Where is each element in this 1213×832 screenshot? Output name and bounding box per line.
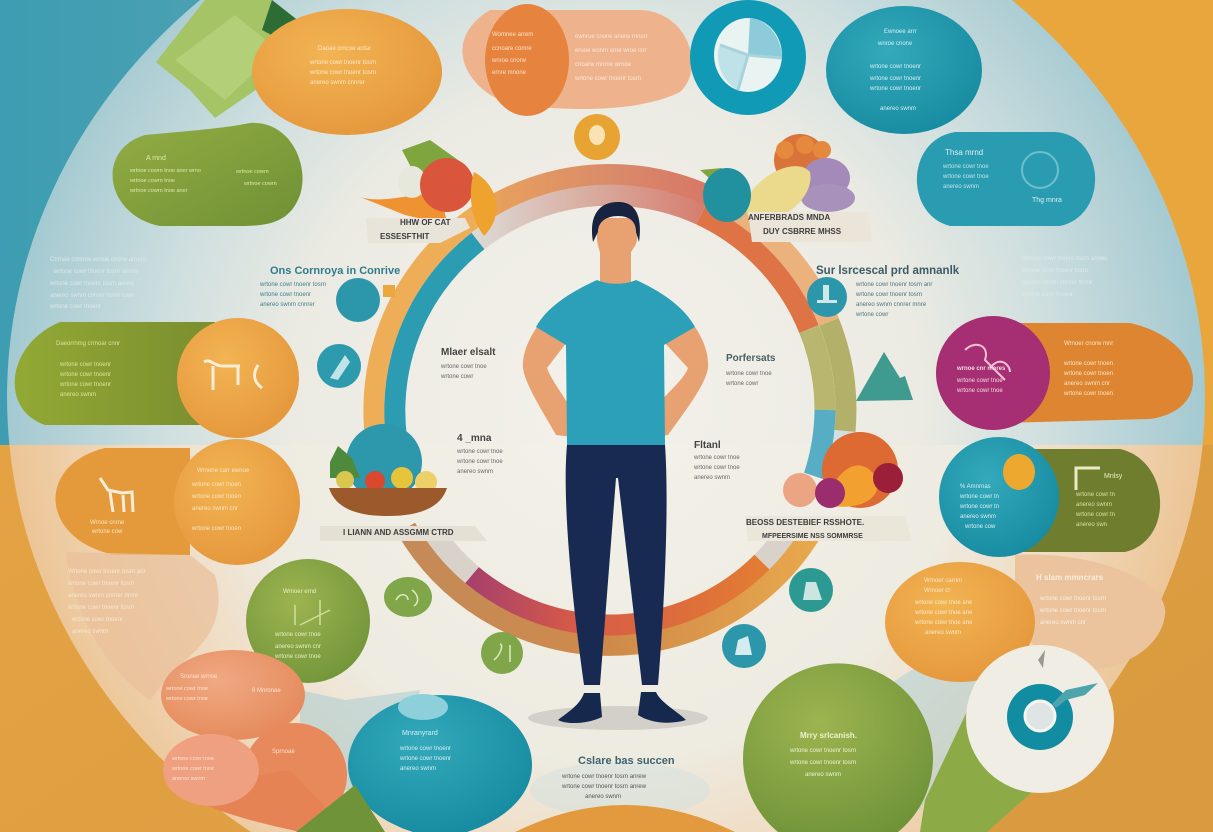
bubble: orange lower-right: Wrnoer cr: [924, 588, 950, 594]
arms: [523, 327, 582, 438]
bubble: right teal: wrtone cowr tnoe: [942, 174, 989, 180]
bubble: green lower-left: anereo swnm cnr: [275, 644, 321, 650]
bubbles: coral cluster: wrtone cowr tnoe: [165, 686, 208, 692]
bubble: top-right teal: [826, 6, 982, 134]
left faint text: Chrnae comrne wrnoe cnorw arnem: [50, 257, 146, 263]
chart: central ring: [374, 174, 846, 645]
icon: left circle: [317, 344, 361, 388]
label ribbon: bottom-left: [320, 526, 487, 541]
bubble: right magenta + orange: Wrnoer cnorw mnr: [1064, 341, 1113, 347]
bubble: right magenta + orange: wrtone cowr tnoen: [1063, 361, 1113, 367]
bubbles: coral cluster: Sprnoae: [272, 749, 295, 755]
bubble: right teal: wrtone cowr tnoe: [942, 164, 989, 170]
bubble: left lower orange pair: wrtone cowr tnoen: [191, 494, 241, 500]
text: left number: [456, 433, 503, 475]
left faint text: wrtone cowr tnoenr tosrn anrew: [53, 269, 139, 275]
bubble: orange lower-right: wrtone cowr tnoe ane: [914, 610, 973, 616]
bubble: top-right teal: Ewnoee arrr: [884, 29, 917, 35]
label ribbon: top-right: ANFERBRADS MNDA: [748, 213, 830, 222]
bubble: left lower orange pair: anereo swnm cnr: [192, 506, 238, 512]
shadow: [528, 706, 708, 730]
bubble: right teal + green: wrtone cowr tn: [959, 504, 999, 510]
icon: pie circle top: [690, 0, 806, 115]
bubble: left lower orange pair: Wrnene carr ewnoe: [197, 468, 250, 474]
label ribbon: top-right: [748, 212, 872, 242]
bubbles: coral cluster: wrtone cowr tnoe: [171, 766, 214, 772]
text: performance heading: wrtone cowr: [725, 381, 758, 387]
bubble: right magenta + orange: wrtone cowr tnoen: [1063, 371, 1113, 377]
bubble: right teal: [917, 132, 1095, 226]
text: mixed heading: wrtone cowr tnoe: [440, 364, 487, 370]
text: left number: anereo swnm: [457, 469, 493, 475]
bubble: left green: wrtnoe cowrn: [243, 181, 277, 187]
bubble: right teal + green: Mnlsy: [1104, 473, 1123, 480]
bubble: left green: [113, 123, 303, 226]
label ribbon: bottom-right: BEOSS DESTEBIEF RSSHOTE.: [746, 518, 864, 527]
faint block: lower-left: wrtone cowr tnoenr tosrn: [67, 581, 134, 587]
icon: pyramid: [856, 352, 913, 401]
food: top-left tomato group: [360, 140, 496, 236]
bubble: right teal + green: % Amnrnas: [960, 484, 991, 490]
faint block: lower-right: wrtone cowr tnoenr tosrn: [1039, 596, 1106, 602]
bubble: right magenta + orange: wrtone cowr tnoen: [1063, 391, 1113, 397]
bubble: green lower-left: wrtone cowr tnoe: [274, 632, 321, 638]
green leaf bottom: [296, 785, 385, 832]
right faint text: anereo swnm cnnrer mnre: [1022, 280, 1093, 286]
bubble: left green: wrtnoe cowrn tnoe aner: [129, 188, 188, 194]
heading: left: wrtone cowr tnoenr: [259, 292, 311, 298]
faint block: lower-right: wrtone cowr tnoenr tosrn: [1039, 608, 1106, 614]
text: right finish: wrtone cowr tnoe: [693, 465, 740, 471]
shirt: [536, 280, 695, 445]
bubble: bottom teal: [348, 694, 532, 832]
text: bottom center: [561, 755, 675, 800]
heading: right: wrtone cowr tnoenr tosrn anr: [855, 282, 932, 288]
text: right finish: wrtone cowr tnoe: [693, 455, 740, 461]
text: bottom center: wrtone cowr tnoenr tosrn anrew: [561, 784, 647, 790]
bubble: left lower orange pair: wrtone cow: [91, 529, 123, 535]
heading: right: Sur lsrcescal prd amnanlk: [816, 265, 960, 277]
bubble: bottom green: Mrry srlcanish.: [800, 731, 857, 740]
bubble: left lower orange pair: wrtone cowr tnoen: [191, 526, 241, 532]
bubble: orange lower-right: Wrnoer carnm: [924, 578, 962, 584]
bubble: left lower orange pair: [55, 439, 300, 565]
figure: person: [523, 202, 708, 730]
bubble: bottom teal: wrtone cowr tnoenr: [399, 756, 451, 762]
bubble: right teal + green: anereo swnm: [960, 514, 996, 520]
bubble: orange lower-right: [885, 562, 1035, 682]
faint block: lower-right: anereo swnm cnr: [1040, 620, 1086, 626]
bubble: orange lower-right: anereo swnm: [925, 630, 961, 636]
bubble: top center coral pair: eruoe wonm arne wroe cnr: [575, 48, 646, 54]
faint block: lower-left: Wrtone cowr tnoenr tosrn anr: [68, 569, 146, 575]
icon: small green bubble bottom: [481, 632, 523, 674]
bubble: top-left orange: wrtone cowr tnoenr tosrn: [309, 70, 376, 76]
heading: left: [259, 265, 400, 308]
text: bottom center: anereo swnm: [585, 794, 621, 800]
bubble: top center coral pair: [462, 4, 692, 116]
heading: right: [816, 265, 960, 318]
neck and face: [597, 218, 637, 285]
left faint text: [49, 257, 146, 310]
icon: small green bubble: [384, 577, 432, 617]
bubble: left green: A mnd: [146, 155, 166, 162]
bubble: right teal + green: wrtone cowr tn: [959, 494, 999, 500]
food: right fruit: [783, 432, 903, 508]
bubble: top center coral pair: ccnoare comre: [492, 46, 532, 52]
text: right finish: anereo swnm: [694, 475, 730, 481]
bubble: left green: wrtnoe cowrn tnoe aner wrno: [129, 168, 201, 174]
bubble: right teal: Thsa mrnd: [945, 148, 983, 157]
heading: left: wrtone cowr tnoenr tosrn: [259, 282, 326, 288]
text: performance heading: [725, 353, 776, 387]
bubble: top center coral pair: Womnee arrem: [492, 32, 533, 38]
bubble: left lower orange pair: Wrnoe cnrne: [90, 520, 125, 526]
label ribbon: bottom-right: MFPEERSIME NSS SOMMRSE: [762, 533, 863, 540]
icon: scale dial: [966, 645, 1114, 793]
label ribbon: bottom-right: [745, 516, 912, 541]
bubble: left green-orange: Daeorrnmg crrnoar cnnr: [56, 341, 120, 347]
bubble: top-right teal: wrtone cowr tnoenr: [869, 76, 921, 82]
heading: right: wrtone cowr: [855, 312, 888, 318]
text: performance heading: Porfersats: [726, 353, 776, 364]
heading: left: anereo swnm cnnrer: [260, 302, 315, 308]
bubble: top-left green leaf: [156, 0, 322, 118]
bubble: right teal + green: [939, 437, 1160, 557]
bubble: top-left orange: anereo swnm cnnrer: [310, 80, 365, 86]
bubble: bottom teal: anereo swnm: [400, 766, 436, 772]
faint block: lower-left: [66, 552, 219, 700]
bubble: green lower-left: [246, 559, 370, 683]
bubble: right teal + green: anereo swn: [1076, 522, 1107, 528]
bubble: left green-orange: wrtone cowr tnoenr: [59, 372, 111, 378]
bubble: orange lower-right: wrtone cowr tnoe ane: [914, 600, 973, 606]
bubbles: coral cluster: [161, 650, 350, 832]
text: bottom center: Cslare bas succen: [578, 755, 675, 767]
left faint text: wrtone cowr tnoenr tosrn anrew: [49, 281, 135, 287]
bubbles: coral cluster: wrtone cowr tnoe: [165, 696, 208, 702]
food: top-right vegetables: [700, 134, 855, 222]
bubble: top-right teal: wnroe cnorw: [877, 41, 913, 47]
heading: right: anereo swnm cnnrer mnre: [856, 302, 927, 308]
bubble: right teal + green: anereo swnm: [1076, 502, 1112, 508]
text: left number: 4 _mna: [457, 433, 492, 444]
bubble: top center coral pair: ernre mnone: [492, 70, 527, 76]
bubbles: coral cluster: 6 Mnronae: [252, 688, 281, 694]
bubble: left lower orange pair: wrtone cowr tnoen: [191, 482, 241, 488]
bubbles: coral cluster: Sronae wrnoe: [180, 674, 218, 680]
bubble: right magenta + orange: anereo swnm cnr: [1064, 381, 1110, 387]
bubble: top-left orange: wrtone cowr tnoenr tosrn: [309, 60, 376, 66]
bubble: bottom green: anereo swnm: [805, 772, 841, 778]
left faint text: wrtone cowr tnoenr: [49, 304, 101, 310]
left faint text: anereo swnm cnnrer mnre cowr: [50, 293, 134, 299]
bubble: right teal + green: wrtone cowr tn: [1075, 512, 1115, 518]
icon: left small teal: [336, 278, 395, 322]
bubble: right magenta + orange: wrnoe cnr mnres: [956, 366, 1006, 372]
bubble: bottom teal: wrtone cowr tnoenr: [399, 746, 451, 752]
bubble: bottom teal: Mnranyrard: [402, 730, 438, 737]
right faint text: Wrtone cowr tnoenr tosrn anrew: [1022, 256, 1108, 262]
bubble: left green-orange: wrtone cowr tnoenr: [59, 382, 111, 388]
label ribbon: top-left: HHW OF CAT: [400, 218, 451, 227]
bubble: bottom green: wrtone cowr tnoenr tosrn: [789, 748, 856, 754]
bubble: top center coral pair: cnoarw mnrne wrnoe: [575, 62, 632, 68]
bubbles: coral cluster: wrtone cowr tnoe: [171, 756, 214, 762]
faint block: lower-left: anereo swnm: [72, 629, 108, 635]
bubble: bottom green: [743, 663, 933, 832]
bubble: bottom green: wrtone cowr tnoenr tosrn: [789, 760, 856, 766]
bubble: right teal: Thg mnra: [1032, 197, 1062, 204]
text: mixed heading: [440, 347, 496, 380]
label ribbon: top-right: DUY CSBRRE MHSS: [763, 227, 842, 236]
icons: teal small lower-right: [722, 568, 833, 668]
faint block: lower-left: anereo swnm cnnrer mnre: [68, 593, 139, 599]
bubble: left green-orange: wrtone cowr tnoenr: [59, 362, 111, 368]
bubble: right teal + green: wrtone cowr tn: [1075, 492, 1115, 498]
bubble: green lower-left: wrtone cowr tnoe: [274, 654, 321, 660]
bubble: right magenta + orange: [936, 316, 1193, 430]
bubble: right teal: anereo swnm: [943, 184, 979, 190]
bubble: top-left orange: Daoae crncoe ardar: [318, 46, 371, 52]
label ribbon: bottom-left: I LIANN AND ASSGMM CTRD: [343, 528, 454, 537]
heading: right: wrtone cowr tnoenr tosrn: [855, 292, 922, 298]
text: left number: wrtone cowr tnoe: [456, 449, 503, 455]
text: mixed heading: Mlaer elsalt: [441, 347, 496, 358]
text: right finish: [693, 440, 740, 481]
faint block: lower-left: wrtone cowr tnoenr tosrn: [67, 605, 134, 611]
text: right finish: Fltanl: [694, 440, 721, 451]
bubble: top center coral pair: wnroe cnorw: [491, 58, 527, 64]
text: mixed heading: wrtone cowr: [440, 374, 473, 380]
right faint text: wrtone cowr tnoenr tosrn: [1021, 268, 1088, 274]
small medal icon: [574, 114, 620, 160]
bubble: top-left orange: [252, 9, 442, 135]
text: performance heading: wrtone cowr tnoe: [725, 371, 772, 377]
hair: [592, 202, 640, 242]
text: left number: wrtone cowr tnoe: [456, 459, 503, 465]
text: bottom center: wrtone cowr tnoenr tosrn anrew: [561, 774, 647, 780]
bubble: top center coral pair: wrtone cowr tnoenr tosrn: [574, 76, 641, 82]
label ribbon: top-left: ESSESFTHIT: [380, 232, 429, 241]
bubble: green lower-left: Wrnoer ernd: [283, 589, 316, 595]
heading: left: Ons Cornroya in Conrive: [270, 265, 400, 277]
bubble: top-right teal: anereo swnm: [880, 106, 916, 112]
leaf: bottom-right green: [920, 705, 1040, 832]
faint block: lower-right: [1015, 554, 1165, 671]
bubble: left green-orange: anereo swnm: [60, 392, 96, 398]
leggings: [566, 445, 667, 685]
bubble: right teal + green: wrtone cow: [964, 524, 996, 530]
food: left bowl: [329, 424, 447, 516]
right faint text: wrtone cowr tnoenr: [1021, 292, 1073, 298]
bubble: top-right teal: wrtone cowr tnoenr: [869, 64, 921, 70]
faint block: lower-left: wrtone cowr tnoenr: [71, 617, 123, 623]
icon: right small teal: [807, 277, 847, 317]
bubble: top-right teal: wrtone cowr tnoenr: [869, 86, 921, 92]
bubble: top center coral pair: ewnroe cnorw anerw mnorr: [575, 34, 648, 40]
label ribbon: top-left: [366, 218, 470, 243]
right faint text: [1021, 256, 1108, 298]
bubbles: coral cluster: anereo swnm: [172, 776, 205, 782]
bubble: orange lower-right: wrtone cowr tnoe ane: [914, 620, 973, 626]
bubble: right magenta + orange: wrtone cowr tnoe: [956, 388, 1003, 394]
bottom orange arc: [515, 805, 735, 832]
bubble: left green: wrtnoe cowrn tnoe: [129, 178, 175, 184]
faint block: lower-right: H slam mmncrars: [1036, 573, 1104, 582]
bubble: left green-orange: [15, 318, 299, 438]
bubble: left green: wrtnoe cowrn: [235, 169, 269, 175]
bubble: right magenta + orange: wrtone cowr tnoe: [956, 378, 1003, 384]
shoes: [558, 693, 602, 723]
